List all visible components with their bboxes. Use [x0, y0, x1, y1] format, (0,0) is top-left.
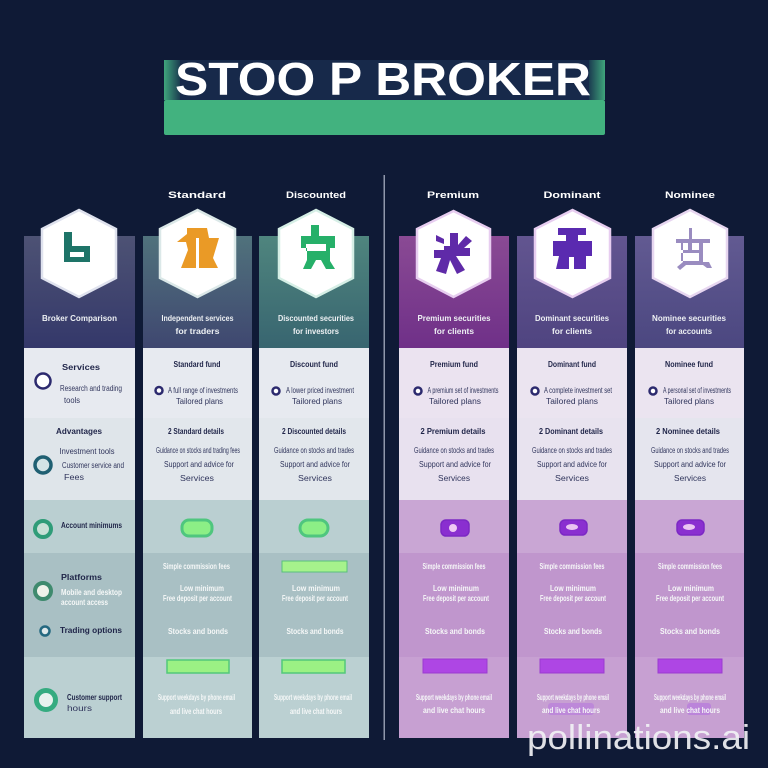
- purple bar: [540, 659, 604, 673]
- panel: premium broker: Low minimum: [433, 584, 479, 593]
- panel: premium broker: Guidance on stocks and trades: [414, 446, 494, 455]
- panel: nominee broker: Services: [674, 474, 706, 483]
- panel: criteria column: Investment tools: [60, 447, 114, 456]
- panel: nominee broker: Tailored plans: [664, 397, 714, 406]
- icon: violet hexagon: [535, 210, 610, 297]
- panel: dominant broker: Support weekdays by phone email: [537, 693, 609, 702]
- title banner: [164, 53, 605, 135]
- panel: nominee broker: [635, 210, 744, 738]
- panel: dominant broker: Dominant fund: [548, 360, 596, 369]
- title banner: STOO P BROKER: [175, 53, 591, 105]
- panel: nominee broker: A personal set of investments: [663, 386, 731, 395]
- panel: dominant broker: Dominant securities: [535, 313, 609, 323]
- panel: premium broker: Stocks and bonds: [425, 627, 485, 636]
- panel: premium broker: Support and advice for: [419, 460, 491, 469]
- column labels: Premium: [427, 190, 479, 200]
- panel: dominant broker: Services: [555, 474, 589, 483]
- panel: nominee broker: Free deposit per account: [656, 594, 724, 603]
- panel: nominee broker: for accounts: [666, 326, 712, 336]
- panel: discounted broker: for investors: [293, 326, 339, 336]
- panel: premium broker: Premium fund: [430, 360, 478, 369]
- panel: premium broker: and live chat hours: [423, 706, 485, 715]
- column labels: Dominant: [544, 190, 601, 200]
- purple bar: [658, 659, 722, 673]
- panel: criteria column: Fees: [64, 473, 84, 482]
- panel: standard broker: Support and advice for: [164, 460, 234, 469]
- icon: purple pill: [441, 520, 469, 536]
- panel: discounted broker: Discounted securities: [278, 313, 354, 323]
- panel: dominant broker: Free deposit per account: [540, 594, 606, 603]
- watermark: pollinations.ai: [527, 719, 750, 757]
- panel: discounted broker: Guidance on stocks and trades: [274, 446, 354, 455]
- icon: lilac hexagon: [653, 210, 727, 297]
- green bar: [282, 660, 345, 673]
- panel: dominant broker: for clients: [552, 326, 592, 336]
- purple smudge: [687, 703, 711, 715]
- panel: premium broker: 2 Premium details: [420, 427, 486, 436]
- panel: standard broker: A full range of investments: [168, 386, 238, 395]
- panel: discounted broker: Support weekdays by phone email: [274, 693, 352, 702]
- panel: dominant broker: Stocks and bonds: [544, 627, 602, 636]
- icon: orange hexagon: [160, 210, 235, 297]
- column labels: Nominee: [665, 190, 715, 200]
- panel: standard broker: and live chat hours: [170, 707, 222, 716]
- panel: premium broker: A premium set of investments: [428, 386, 498, 395]
- panel: standard broker: Support weekdays by phone email: [158, 693, 235, 702]
- panel: criteria column: tools: [64, 396, 80, 405]
- panel: premium broker: Services: [438, 474, 470, 483]
- panel: discounted broker: [259, 210, 369, 738]
- green bar: [282, 561, 347, 572]
- panel: criteria column: Platforms: [61, 573, 103, 582]
- panel: criteria column: account access: [61, 598, 108, 607]
- panel: discounted broker: Tailored plans: [292, 397, 342, 406]
- icon: purple pill: [677, 520, 704, 535]
- panel: nominee broker: Guidance on stocks and trades: [651, 446, 729, 455]
- panel: criteria column: Services: [62, 363, 101, 372]
- panel: standard broker: for traders: [176, 326, 220, 336]
- panel: standard broker: Free deposit per account: [163, 594, 232, 603]
- panel: criteria column: hours: [67, 704, 92, 713]
- panel: standard broker: Guidance on stocks and trading fees: [156, 446, 240, 455]
- panel: premium broker: Support weekdays by phone email: [416, 693, 492, 702]
- icon: green pill: [300, 520, 328, 536]
- panel: discounted broker: Free deposit per account: [282, 594, 348, 603]
- panel: discounted broker: Stocks and bonds: [286, 627, 344, 636]
- panel: nominee broker: and live chat hours: [660, 706, 720, 715]
- panel: nominee broker: Simple commission fees: [658, 562, 722, 571]
- panel: discounted broker: and live chat hours: [290, 707, 342, 716]
- panel: discounted broker: Services: [298, 474, 332, 483]
- panel: dominant broker: Low minimum: [550, 584, 596, 593]
- column labels: [168, 190, 715, 200]
- panel: dominant broker: A complete investment set: [544, 386, 613, 395]
- panel: standard broker: Simple commission fees: [163, 562, 230, 571]
- purple smudge: [548, 703, 594, 715]
- panel: premium broker: [399, 211, 509, 738]
- panel: standard broker: Standard fund: [174, 360, 221, 369]
- icon: criteria hexagon: [42, 210, 116, 297]
- panel: premium broker: Free deposit per account: [423, 594, 489, 603]
- panel: standard broker: Independent services: [162, 313, 234, 323]
- panel: criteria column: Mobile and desktop: [61, 588, 122, 597]
- icon: purple hexagon: [417, 211, 490, 297]
- purple bar: [423, 659, 487, 673]
- panel: criteria column: Customer support: [67, 693, 122, 702]
- column labels: Standard: [168, 190, 226, 200]
- panel: criteria column: Trading options: [60, 626, 123, 635]
- panel: dominant broker: [517, 210, 627, 738]
- panel: criteria column: Advantages: [56, 427, 103, 436]
- column labels: Discounted: [286, 190, 346, 200]
- panel: criteria column: Account minimums: [61, 521, 122, 530]
- panel: standard broker: Tailored plans: [176, 397, 223, 406]
- panel: standard broker: Low minimum: [180, 584, 224, 593]
- panel: premium broker: Premium securities: [418, 313, 491, 323]
- panel: dominant broker: Support and advice for: [537, 460, 607, 469]
- panel: discounted broker: 2 Discounted details: [282, 427, 346, 436]
- panel: criteria column: Customer service and: [62, 461, 124, 470]
- panel: dominant broker: Simple commission fees: [540, 562, 605, 571]
- panel: premium broker: for clients: [434, 326, 474, 336]
- panel: dominant broker: and live chat hours: [542, 706, 600, 715]
- panel: standard broker: [143, 210, 252, 738]
- panel: discounted broker: Discount fund: [290, 360, 338, 369]
- panel: standard broker: 2 Standard details: [168, 427, 224, 436]
- panel: dominant broker: 2 Dominant details: [539, 427, 603, 436]
- panel: standard broker: Stocks and bonds: [168, 627, 228, 636]
- icon: green pill: [182, 520, 212, 536]
- panel: nominee broker: 2 Nominee details: [656, 427, 721, 436]
- green bar: [167, 660, 229, 673]
- panel: criteria column: [24, 210, 135, 738]
- panel: dominant broker: Guidance on stocks and trades: [532, 446, 612, 455]
- panel: nominee broker: Low minimum: [668, 584, 714, 593]
- panel: nominee broker: Support and advice for: [654, 460, 726, 469]
- panel: discounted broker: A lower priced investment: [286, 386, 355, 395]
- icon: purple pill: [560, 520, 587, 535]
- panel: nominee broker: Nominee securities: [652, 313, 726, 323]
- icon: green hexagon: [279, 210, 353, 297]
- panel: criteria column: Research and trading: [60, 384, 122, 393]
- center divider: [384, 175, 385, 740]
- panel: standard broker: Services: [180, 474, 214, 483]
- panel: discounted broker: Low minimum: [292, 584, 340, 593]
- panel: premium broker: Simple commission fees: [422, 562, 486, 571]
- panel: dominant broker: Tailored plans: [546, 397, 598, 406]
- panel: nominee broker: Nominee fund: [665, 360, 713, 369]
- panel: nominee broker: Stocks and bonds: [660, 627, 720, 636]
- panel: premium broker: Tailored plans: [429, 397, 481, 406]
- panel: criteria column: Broker Comparison: [42, 313, 117, 323]
- panel: discounted broker: Support and advice for: [280, 460, 350, 469]
